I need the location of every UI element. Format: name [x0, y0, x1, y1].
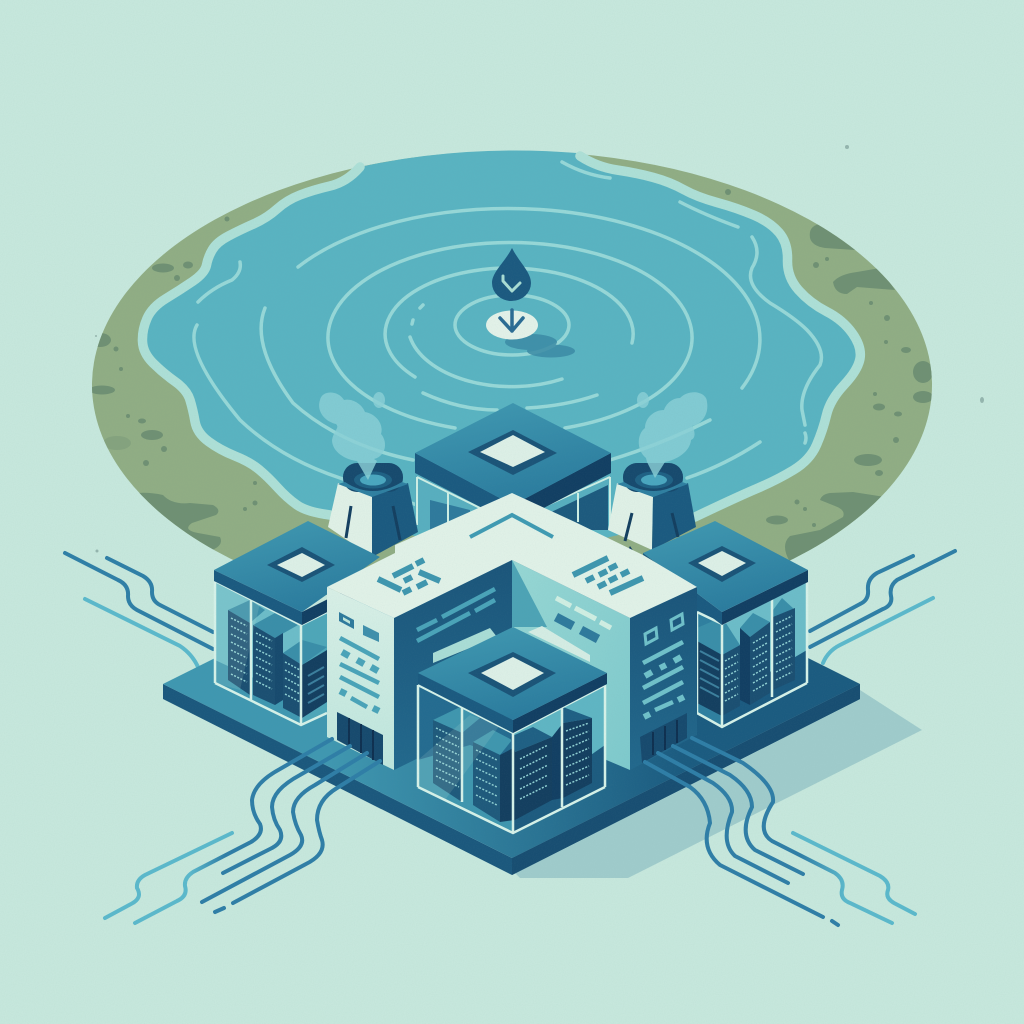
server rack three	[283, 640, 327, 718]
ledge	[528, 626, 590, 662]
cooling water lines, upper right	[810, 551, 955, 663]
right roof tiles	[573, 558, 643, 593]
ground shadow of the platform	[512, 690, 922, 878]
steam plume, right	[637, 392, 707, 478]
server rack one	[228, 600, 265, 695]
server rack two	[253, 613, 298, 705]
building: main block left wing	[327, 560, 512, 770]
wall windows	[417, 589, 495, 641]
server rack one	[433, 707, 480, 802]
building: right glass hall with server racks	[643, 521, 808, 727]
pale wall panels	[340, 638, 379, 711]
building: left glass hall with server racks	[214, 521, 380, 725]
ground: olive shoreline disc	[89, 151, 933, 619]
icon: water drop	[492, 248, 531, 301]
building: main block right wing	[512, 560, 697, 770]
server rack three	[510, 727, 552, 820]
steam plume, left	[319, 392, 385, 480]
cooling tower, left	[328, 463, 418, 557]
bottom left coolant pipes	[105, 739, 380, 923]
server rack two	[740, 613, 770, 705]
server rack one	[697, 617, 740, 716]
building: main block roof	[327, 493, 697, 618]
icon: shadow below the intake	[505, 334, 575, 358]
server rack four	[552, 707, 592, 800]
building: front glass hall with server racks	[418, 627, 607, 833]
wall vents	[556, 598, 611, 639]
loading door, left	[337, 712, 383, 765]
cooling tower, right	[608, 463, 696, 552]
icon: intake target with down arrow	[486, 310, 538, 340]
server rack three	[773, 598, 795, 690]
loading door, right	[640, 713, 687, 763]
illustration: data centre campus beside a depleted lake	[62, 145, 984, 928]
ripples spreading across the lake	[194, 162, 821, 505]
building: rear glass hall	[415, 403, 611, 530]
cooling water lines, upper left	[65, 553, 213, 667]
bottom right coolant pipes	[645, 738, 915, 925]
left roof tiles	[378, 560, 440, 593]
platform base	[163, 510, 860, 875]
windows on dark wall	[643, 614, 684, 717]
lake water with pale shoreline	[142, 150, 860, 560]
server rack two	[473, 730, 515, 822]
